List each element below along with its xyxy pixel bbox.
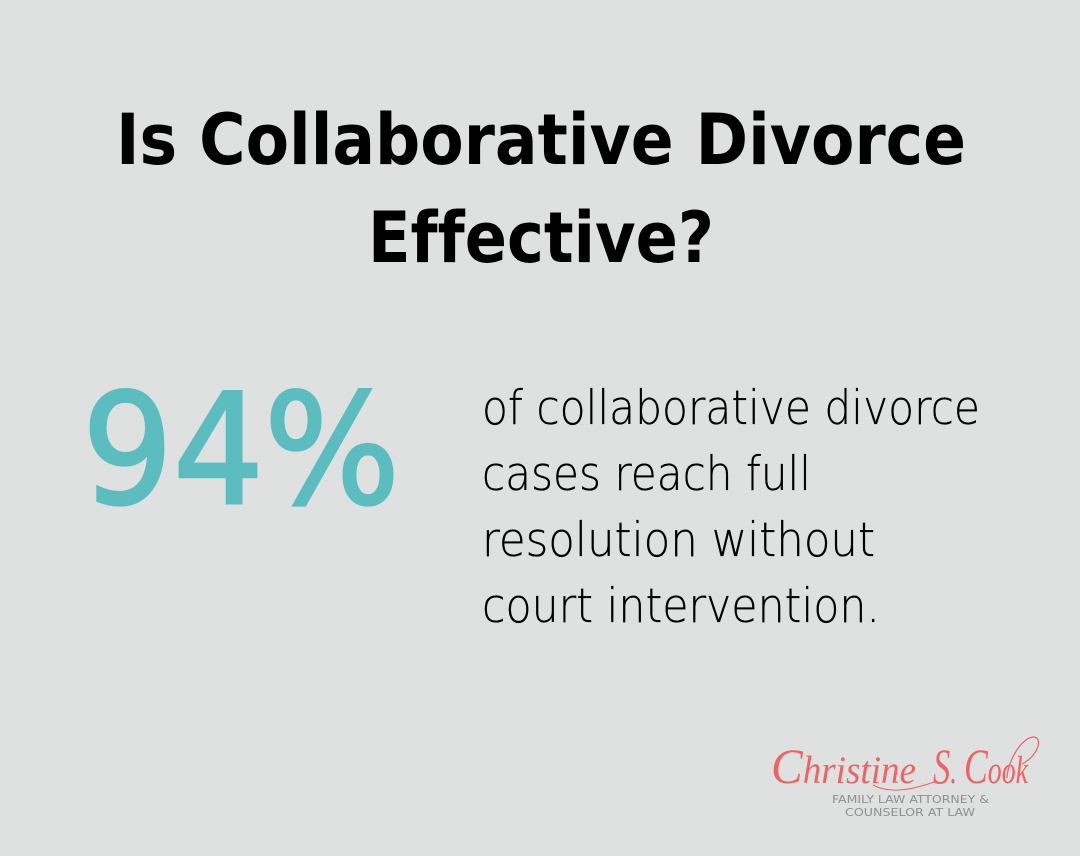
title: Effective?: [368, 197, 714, 279]
statistic description: cases reach full: [482, 447, 811, 502]
logo: Christine S. Cook: Christine: [771, 738, 916, 794]
logo: Christine S. Cook: COUNSELOR AT LAW: [845, 807, 976, 819]
logo: Christine S. Cook: [771, 737, 1038, 819]
statistic description: resolution without: [482, 513, 875, 568]
logo: Christine S. Cook: FAMILY LAW ATTORNEY &: [832, 794, 989, 806]
title: Is Collaborative Divorce: [116, 99, 966, 181]
statistic description: [482, 381, 980, 634]
logo: Christine S. Cook: Cook: [964, 738, 1028, 794]
statistic description: court intervention.: [482, 579, 880, 634]
statistic description: of collaborative divorce: [482, 381, 980, 436]
statistic: 94%: 94%: [82, 362, 400, 540]
logo: Christine S. Cook: S.: [933, 738, 957, 794]
title: [116, 99, 966, 279]
